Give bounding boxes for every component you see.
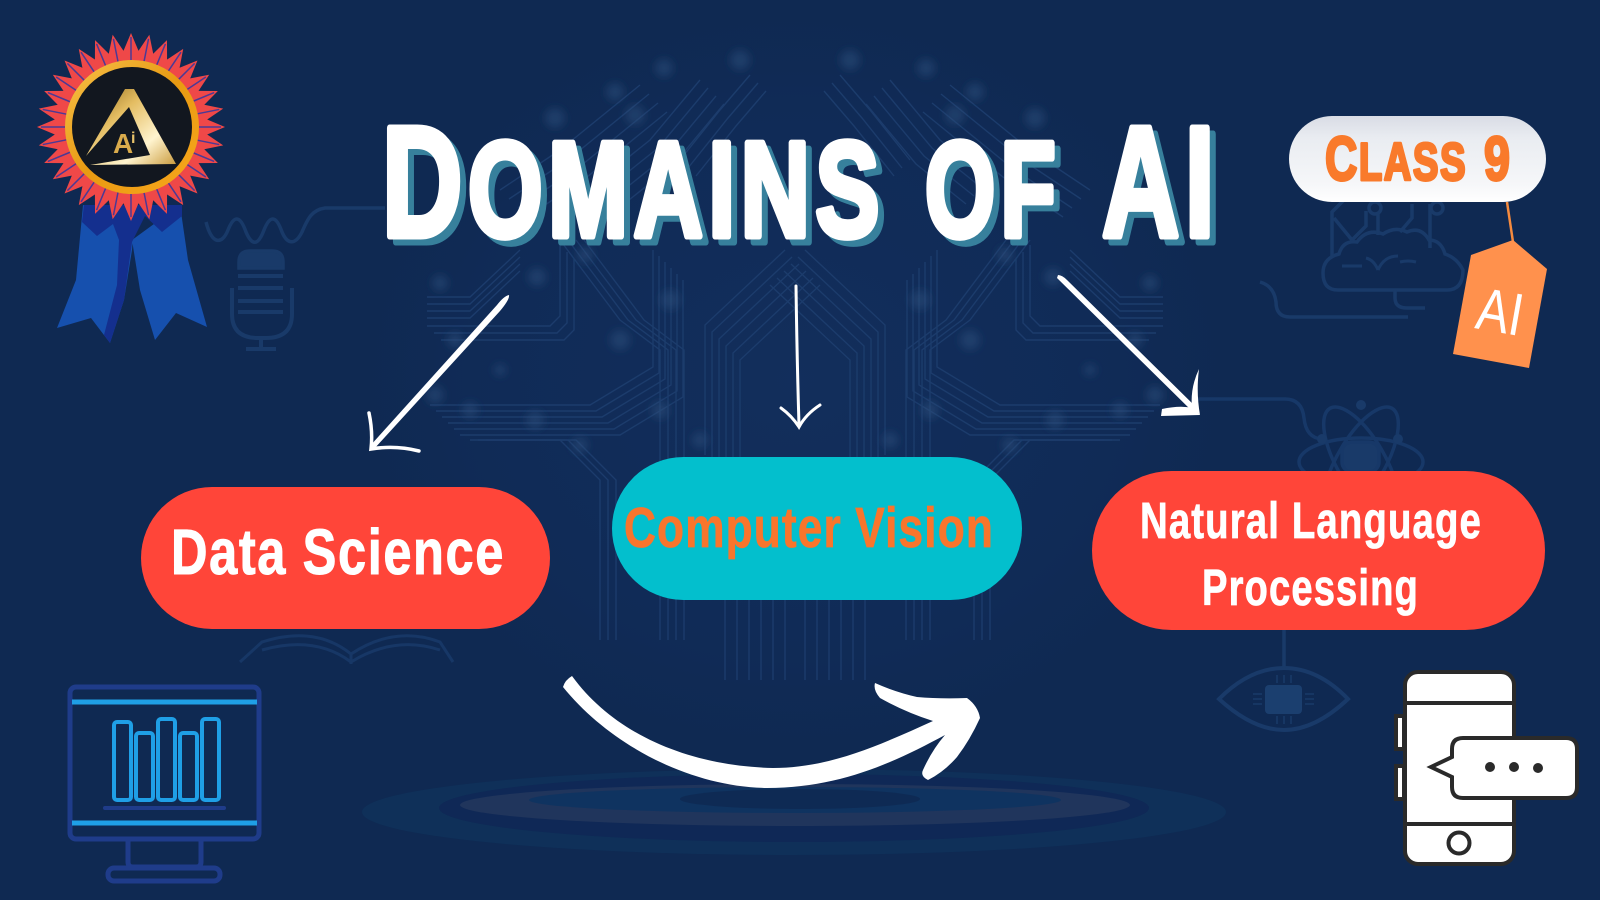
arrow: to Data Science bbox=[369, 295, 509, 451]
pill: Natural Language Processing: Natural Language bbox=[1140, 492, 1482, 549]
faint icon: brain with circuit bbox=[1260, 200, 1463, 317]
AI tag: AI bbox=[1472, 275, 1529, 349]
icon: phone with chat bubble bbox=[1396, 672, 1577, 864]
class pill: CLASS bbox=[1325, 125, 1467, 194]
background circuit brain bbox=[426, 50, 1164, 680]
icon: gold medallion: i bbox=[131, 130, 135, 147]
title: AI bbox=[1102, 95, 1220, 270]
faint icon: open book bbox=[240, 636, 453, 664]
arrow: to Natural Language Processing bbox=[1057, 275, 1200, 416]
icon: monitor with bar chart bbox=[70, 687, 259, 881]
title: DOMAINS bbox=[382, 95, 885, 270]
faint icon: eye chip bbox=[1219, 630, 1348, 730]
background platform bbox=[362, 769, 1226, 855]
class pill bbox=[1289, 116, 1546, 202]
icon: ribbon tails bbox=[57, 205, 207, 343]
pill: Computer Vision: Computer Vision bbox=[624, 496, 994, 560]
pill: Data Science: Data Science bbox=[171, 516, 505, 588]
icon: gold medallion: A bbox=[113, 128, 133, 159]
curved arrow bbox=[563, 676, 980, 788]
AI tag bbox=[1453, 202, 1547, 368]
award badge bbox=[22, 18, 240, 343]
icon: gold medallion bbox=[65, 60, 199, 194]
pill: Natural Language Processing: Processing bbox=[1202, 559, 1419, 616]
background glow bbox=[325, 0, 1265, 780]
pill: Natural Language Processing bbox=[1092, 471, 1545, 630]
arrow: to Computer Vision bbox=[781, 286, 820, 427]
pill: Data Science bbox=[141, 487, 550, 629]
icon: starburst rosette bbox=[22, 18, 240, 236]
class pill: 9 bbox=[1484, 125, 1510, 194]
title: OF bbox=[925, 114, 1061, 265]
faint icon: microphone and sound wave bbox=[206, 208, 385, 349]
faint icon: atom and database bbox=[1197, 396, 1423, 528]
pill: Computer Vision bbox=[612, 457, 1022, 600]
